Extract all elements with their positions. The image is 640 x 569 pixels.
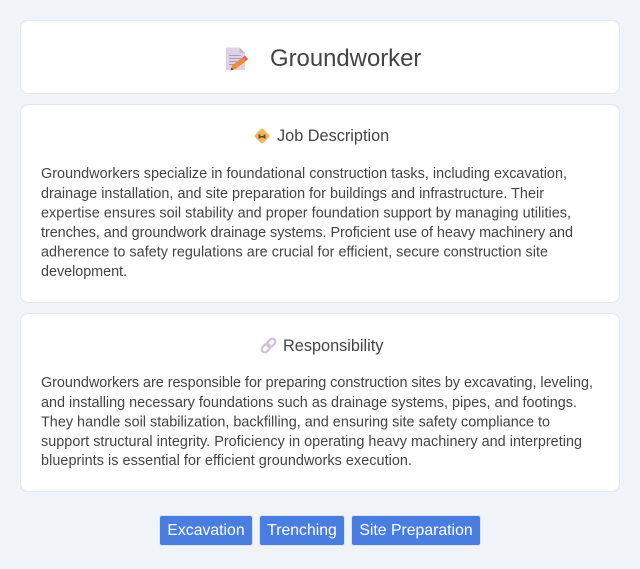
title: Groundworker xyxy=(270,45,421,72)
icon: construction sign xyxy=(254,128,270,144)
panel: title card xyxy=(20,20,620,94)
text block: job description: trenches, and groundwork drainage systems. Proficient use of heavy machinery and xyxy=(41,225,573,241)
tag: Trenching: Trenching xyxy=(267,522,337,539)
icon: chain link xyxy=(260,338,276,354)
panel: responsibility xyxy=(20,313,620,492)
panel: job description xyxy=(20,104,620,303)
tag: Site Preparation xyxy=(352,516,480,545)
text block: job description: development. xyxy=(41,264,127,280)
tag: Excavation xyxy=(160,516,252,545)
text block: job description: expertise ensures soil stability and proper foundation support by managing utilities, xyxy=(41,206,571,222)
tag: Site Preparation: Site Preparation xyxy=(359,522,473,539)
text block: responsibility: They handle soil stabilization, backfilling, and ensuring site safety compliance to xyxy=(41,414,550,430)
tag: Excavation: Excavation xyxy=(167,522,245,539)
text block: responsibility: blueprints is essential for efficient groundworks execution. xyxy=(41,453,412,469)
tag: Trenching xyxy=(260,516,344,545)
text block: job description: drainage installation, and site preparation for buildings and infrastructure. Their xyxy=(41,186,544,202)
text block: responsibility: and installing necessary foundations such as drainage systems, pipes, and footings. xyxy=(41,395,577,411)
text block: job description: adherence to safety regulations are crucial for efficient, secure construction site xyxy=(41,244,548,260)
icon: document with pencil xyxy=(226,48,248,70)
text block: responsibility: Groundworkers are responsible for preparing construction sites by excavating, leveling, xyxy=(41,375,593,391)
text block: responsibility: support structural integrity. Proficiency in operating heavy machinery and interpreting xyxy=(41,434,582,450)
heading: responsibility: Responsibility xyxy=(283,337,383,355)
heading: job description: Job Description xyxy=(277,127,389,145)
text block: job description: Groundworkers specialize in foundational construction tasks, including excavation, xyxy=(41,166,567,182)
